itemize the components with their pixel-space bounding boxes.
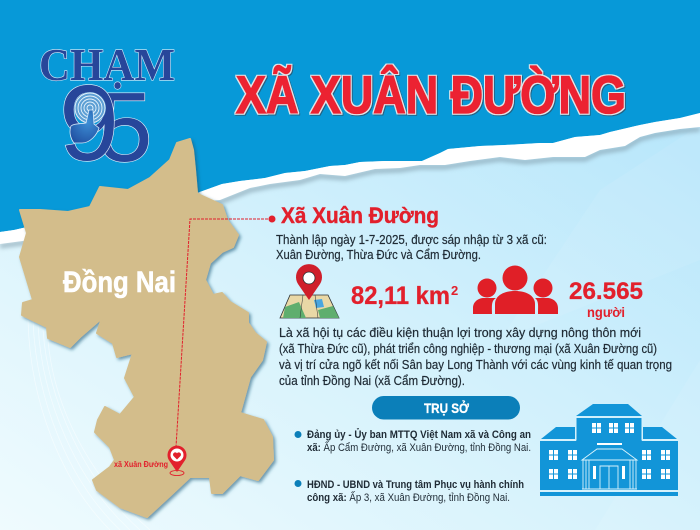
- description text: (xã Thừa Đức cũ), phát triển công nghiệp - thương mại (xã Xuân Đường cũ): [279, 342, 657, 356]
- map label: Đồng Nai: Đồng Nai: [63, 266, 176, 299]
- province shape: [20, 139, 273, 517]
- logo number 5: 5: [98, 72, 153, 182]
- address 1: xã: Ấp Cẩm Đường, xã Xuân Đường, tỉnh Đồng Nai.: [307, 441, 531, 454]
- logo wordmark: CHẠM: [39, 39, 175, 90]
- heading: Xã Xuân Đường: [281, 203, 439, 228]
- logo number 9: 9: [59, 62, 119, 183]
- address 2: công xã: Ấp 3, xã Xuân Đường, tỉnh Đồng Nai.: [307, 491, 510, 504]
- decorative lighter wedge: [500, 125, 700, 530]
- title: XÃ XUÂN ĐƯỜNG: [236, 64, 626, 125]
- torn paper edge shadow: [0, 129, 700, 246]
- icon: folded map with pin: [280, 264, 339, 318]
- address 2: HĐND - UBND và Trung tâm Phục vụ hành chính: [307, 479, 524, 491]
- description text: Là xã hội tụ các điều kiện thuận lợi trong xây dựng nông thôn mới: [279, 326, 641, 340]
- logo: Chạm 95: [39, 39, 175, 183]
- icon: building: [540, 404, 678, 496]
- connector dot: [268, 216, 276, 222]
- address 2: [294, 479, 524, 504]
- light paper background: [0, 113, 700, 530]
- intro text: Thành lập ngày 1-7-2025, được sáp nhập từ 3 xã cũ:: [276, 233, 547, 247]
- stat: population: 26.565: [569, 278, 643, 305]
- connector line: [176, 219, 272, 447]
- stat: population unit: người: [587, 304, 625, 320]
- description text: và vị trí cửa ngõ kết nối Sân bay Long Thành với các vùng kinh tế quan trọng: [279, 358, 672, 372]
- headquarters pill: TRỤ SỞ: [424, 401, 469, 416]
- torn paper white edge: [0, 113, 700, 244]
- address 1: Đảng ủy - Ủy ban MTTQ Việt Nam xã và Công an: [307, 428, 531, 441]
- intro text: [276, 233, 547, 262]
- icon: fingerprint: [74, 92, 106, 124]
- map label: xã Xuân Đường: xã Xuân Đường: [114, 460, 168, 469]
- intro text: Xuân Đường, Thừa Đức và Cẩm Đường.: [276, 248, 481, 262]
- headquarters pill: [372, 396, 520, 420]
- map: Đồng Nai province: [20, 139, 273, 517]
- stat: area: 82,11 km: [351, 282, 450, 310]
- icon: location pin: [168, 446, 187, 476]
- icon: people: [473, 266, 558, 314]
- description text: [279, 326, 672, 388]
- stat: area superscript: 2: [451, 283, 458, 298]
- description text: của tỉnh Đồng Nai (xã Cẩm Đường).: [279, 374, 465, 388]
- icon: pointing hand: [70, 110, 99, 143]
- address 1: [294, 428, 531, 454]
